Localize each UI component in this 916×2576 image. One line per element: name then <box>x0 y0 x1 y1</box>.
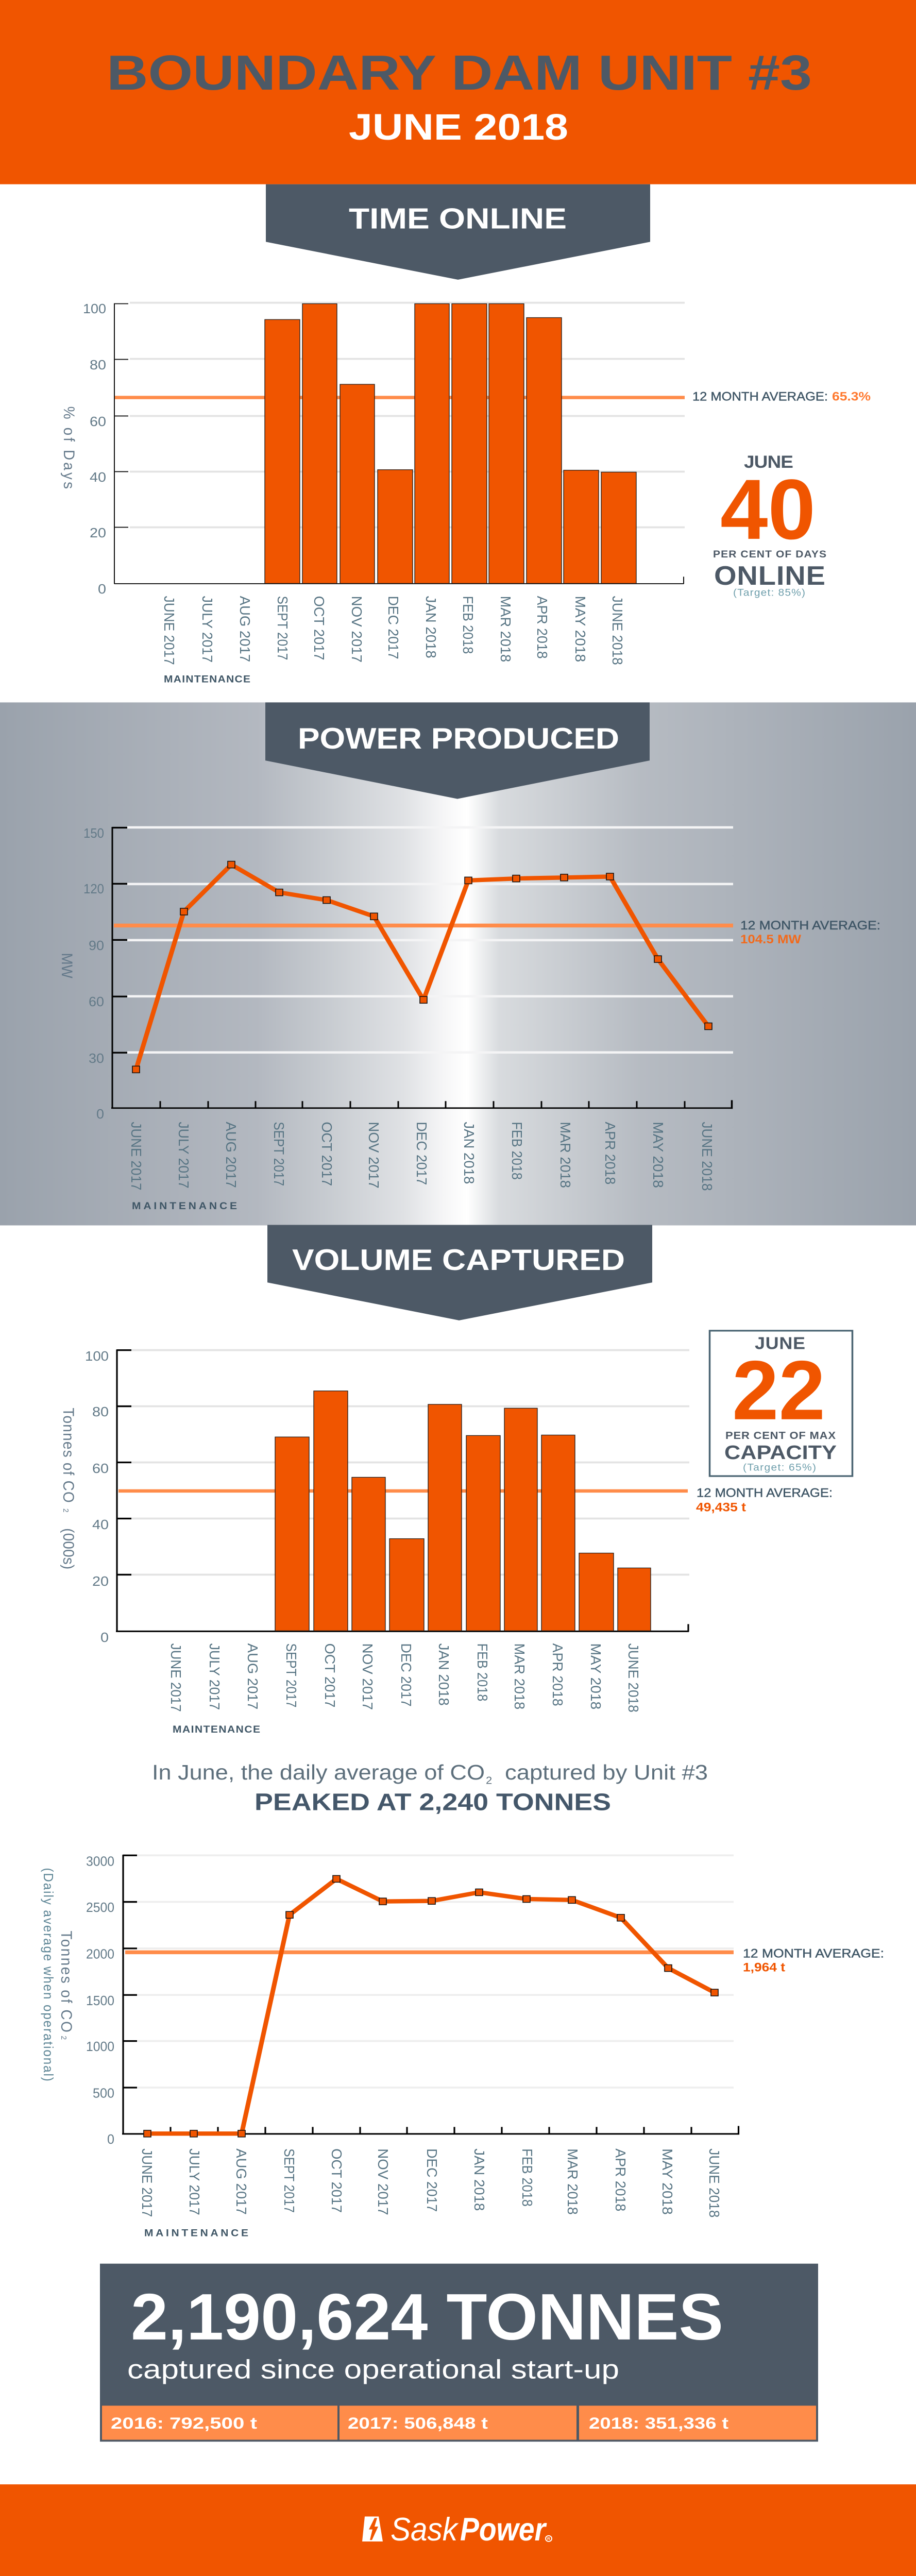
month labels: JUNE 2017 <box>168 1643 184 1712</box>
bar chart: volume captured: 20 <box>92 1574 109 1589</box>
month labels: FEB 2018 <box>519 2148 535 2207</box>
line chart: daily average: 1500 <box>86 1993 114 2008</box>
logo: SaskPower <box>362 2511 552 2548</box>
statement: daily average <box>152 1761 708 1816</box>
footer band <box>0 2484 916 2576</box>
12 month average label: 49,435 t <box>696 1500 747 1514</box>
line chart: daily average: 1000 <box>86 2039 114 2054</box>
month labels: FEB 2018 <box>460 596 476 654</box>
month labels: AUG 2017 <box>237 596 253 662</box>
axis title: MW <box>58 953 75 978</box>
month labels: APR 2018 <box>613 2148 629 2211</box>
bar chart: time online: 0 <box>98 582 106 597</box>
panel: total captured <box>100 2264 818 2442</box>
title: BOUNDARY DAM UNIT #3 <box>107 45 812 100</box>
axis title: (000s) <box>60 1528 77 1569</box>
month labels: JUNE 2017 <box>128 1122 144 1190</box>
month labels: JULY 2017 <box>207 1643 223 1710</box>
12 month average label: 12 MONTH AVERAGE: <box>740 919 880 933</box>
bar chart: volume captured: 0 <box>100 1630 109 1645</box>
month labels: APR 2018 <box>534 596 550 659</box>
maintenance note: MAINTENANCE <box>164 674 250 685</box>
line chart: power produced <box>58 826 733 1212</box>
axis title <box>60 1408 77 1569</box>
month labels: JUNE 2017 <box>161 596 177 665</box>
month labels: OCT 2017 <box>329 2148 345 2213</box>
statement: daily average: 2 <box>486 1774 492 1786</box>
heading banner: power produced <box>265 702 650 799</box>
12 month average label: 65.3% <box>832 389 871 403</box>
month labels: JULY 2017 <box>199 596 215 663</box>
panel: time online <box>60 184 871 685</box>
month labels: SEPT 2017 <box>271 1122 287 1186</box>
line chart: power produced: 30 <box>89 1051 104 1066</box>
month labels: MAY 2018 <box>659 2148 675 2215</box>
month labels: OCT 2017 <box>319 1122 335 1186</box>
12 month average label: 12 MONTH AVERAGE: <box>697 1486 833 1500</box>
month labels: MAR 2018 <box>512 1643 528 1709</box>
line chart: daily average: 0 <box>107 2132 114 2147</box>
callout: June 40 per cent online <box>713 452 826 598</box>
month labels: JUNE 2018 <box>609 596 625 665</box>
line chart: daily average: 2500 <box>86 1900 114 1915</box>
bar chart: time online: 100 <box>83 301 106 316</box>
axis title: (Daily average when operational) <box>41 1868 56 2081</box>
12 month average label <box>740 919 880 946</box>
12 month average label: 1,964 t <box>743 1960 786 1974</box>
month labels: SEPT 2017 <box>281 2148 297 2213</box>
month labels: MAY 2018 <box>588 1643 604 1709</box>
bar chart: time online: 40 <box>90 470 106 485</box>
callout: June 40 per cent online: JUNE <box>744 452 793 472</box>
maintenance note: MAINTENANCE <box>173 1724 260 1735</box>
month labels: JAN 2018 <box>423 596 439 658</box>
month labels: APR 2018 <box>602 1122 618 1184</box>
line chart: power produced: 60 <box>89 994 104 1009</box>
logo: SaskPower: Sask <box>391 2511 459 2548</box>
line chart: daily average: 500 <box>93 2086 114 2100</box>
yearly totals row <box>102 2405 816 2440</box>
month labels: DEC 2017 <box>398 1643 414 1707</box>
month labels: FEB 2018 <box>509 1122 525 1180</box>
month labels: APR 2018 <box>550 1643 566 1706</box>
month labels <box>139 2148 722 2217</box>
bar chart: volume captured: 40 <box>92 1517 109 1532</box>
month labels: DEC 2017 <box>385 596 401 659</box>
bar chart: time online: 80 <box>90 358 106 372</box>
maintenance note: MAINTENANCE <box>132 1200 237 1212</box>
month labels: MAY 2018 <box>650 1122 666 1188</box>
yearly totals row: 2018: 351,336 t <box>589 2414 728 2432</box>
bar chart: time online <box>60 301 685 685</box>
month labels: JAN 2018 <box>471 2148 487 2211</box>
month labels: OCT 2017 <box>311 596 327 660</box>
line chart: daily average: 2000 <box>86 1946 114 1961</box>
header band <box>0 0 916 184</box>
month labels: AUG 2017 <box>223 1122 239 1188</box>
month labels: JULY 2017 <box>176 1122 192 1189</box>
callout: June 40 per cent online: ONLINE <box>714 561 825 591</box>
line chart: power produced: 120 <box>83 882 104 896</box>
maintenance note: MAINTENANCE <box>144 2228 248 2239</box>
callout box: June 22 per cent capacity: PER CENT OF MAX <box>725 1430 836 1442</box>
heading banner: time online: TIME ONLINE <box>349 202 567 235</box>
month labels: OCT 2017 <box>322 1643 338 1707</box>
month labels: FEB 2018 <box>474 1643 490 1701</box>
month labels: MAR 2018 <box>498 596 514 662</box>
total caption: captured since operational start-up <box>127 2354 619 2384</box>
12 month average label: 12 MONTH AVERAGE: <box>692 389 828 403</box>
month labels: AUG 2017 <box>245 1643 261 1709</box>
month labels: JAN 2018 <box>436 1643 452 1706</box>
month labels: JUNE 2017 <box>139 2148 155 2217</box>
12 month average label <box>696 1486 833 1514</box>
month labels: JUNE 2018 <box>699 1122 715 1191</box>
month labels: MAY 2018 <box>572 596 588 662</box>
panel: power produced <box>0 702 916 1225</box>
month labels: JULY 2017 <box>186 2148 202 2215</box>
month labels <box>128 1122 715 1191</box>
month labels: NOV 2017 <box>360 1643 376 1710</box>
axis title: Tonnes of CO <box>58 1930 75 2032</box>
logo: SaskPower: R <box>547 2536 550 2541</box>
line chart: power produced: 90 <box>89 938 104 953</box>
month labels: MAR 2018 <box>557 1122 573 1188</box>
month labels <box>161 596 625 665</box>
month labels: DEC 2017 <box>424 2148 440 2212</box>
bar chart: volume captured <box>60 1349 689 1735</box>
yearly totals row: 2016: 792,500 t <box>111 2414 257 2432</box>
callout box: June 22 per cent capacity <box>710 1331 852 1476</box>
heading banner: power produced: POWER PRODUCED <box>298 722 619 755</box>
line chart: power produced: 0 <box>96 1107 104 1122</box>
logo: SaskPower: Power <box>460 2511 547 2548</box>
heading banner: volume captured: VOLUME CAPTURED <box>292 1243 625 1277</box>
line chart: daily average: 3000 <box>86 1854 114 1869</box>
month labels: MAR 2018 <box>565 2148 581 2215</box>
yearly totals row: 2017: 506,848 t <box>348 2414 488 2432</box>
month labels: SEPT 2017 <box>283 1643 299 1707</box>
month labels: AUG 2017 <box>233 2148 249 2215</box>
axis title <box>41 1868 75 2081</box>
statement: daily average: PEAKED AT 2,240 TONNES <box>255 1789 611 1816</box>
statement: daily average: In June, the daily average of CO <box>152 1761 485 1785</box>
month labels: NOV 2017 <box>375 2148 391 2215</box>
panel: volume captured <box>60 1225 852 1735</box>
total tonnes figure: 2,190,624 TONNES <box>131 2280 723 2354</box>
subtitle date: JUNE 2018 <box>349 106 568 147</box>
line chart: power produced: 150 <box>83 826 104 841</box>
heading banner: time online <box>266 184 650 280</box>
callout: June 40 per cent online: (Target: 85%) <box>733 587 805 598</box>
axis title: % of Days <box>60 406 77 489</box>
bar chart: volume captured: 80 <box>92 1404 109 1419</box>
callout box: June 22 per cent capacity: CAPACITY <box>724 1442 837 1464</box>
month labels: SEPT 2017 <box>275 596 291 660</box>
month labels: JUNE 2018 <box>625 1643 641 1713</box>
line chart: daily average <box>41 1854 739 2239</box>
month labels <box>168 1643 641 1713</box>
bar chart: volume captured: 100 <box>85 1349 109 1364</box>
callout box: June 22 per cent capacity: JUNE <box>755 1334 805 1353</box>
month labels: NOV 2017 <box>366 1122 382 1189</box>
12 month average label: 12 MONTH AVERAGE: <box>743 1946 884 1960</box>
bar chart: time online: 60 <box>90 414 106 429</box>
month labels: JAN 2018 <box>461 1122 477 1184</box>
axis title: 2 <box>61 1509 70 1513</box>
panel: daily average captured <box>41 1761 884 2239</box>
month labels: NOV 2017 <box>349 596 365 663</box>
callout box: June 22 per cent capacity: (Target: 65%) <box>743 1462 816 1473</box>
bar chart: volume captured: 60 <box>92 1461 109 1476</box>
axis title: Tonnes of CO <box>60 1408 77 1503</box>
12 month average label: 104.5 MW <box>740 933 801 946</box>
bar chart: time online: 20 <box>90 526 106 540</box>
month labels: DEC 2017 <box>414 1122 430 1185</box>
heading banner: volume captured <box>267 1225 652 1320</box>
axis title: 2 <box>59 2036 67 2040</box>
callout: June 40 per cent online: PER CENT OF DAYS <box>713 549 826 560</box>
12 month average label <box>743 1946 884 1974</box>
statement: daily average: captured by Unit #3 <box>505 1761 708 1785</box>
callout box: June 22 per cent capacity: 22 <box>732 1343 825 1437</box>
callout: June 40 per cent online: 40 <box>720 462 816 557</box>
month labels: JUNE 2018 <box>706 2148 722 2217</box>
